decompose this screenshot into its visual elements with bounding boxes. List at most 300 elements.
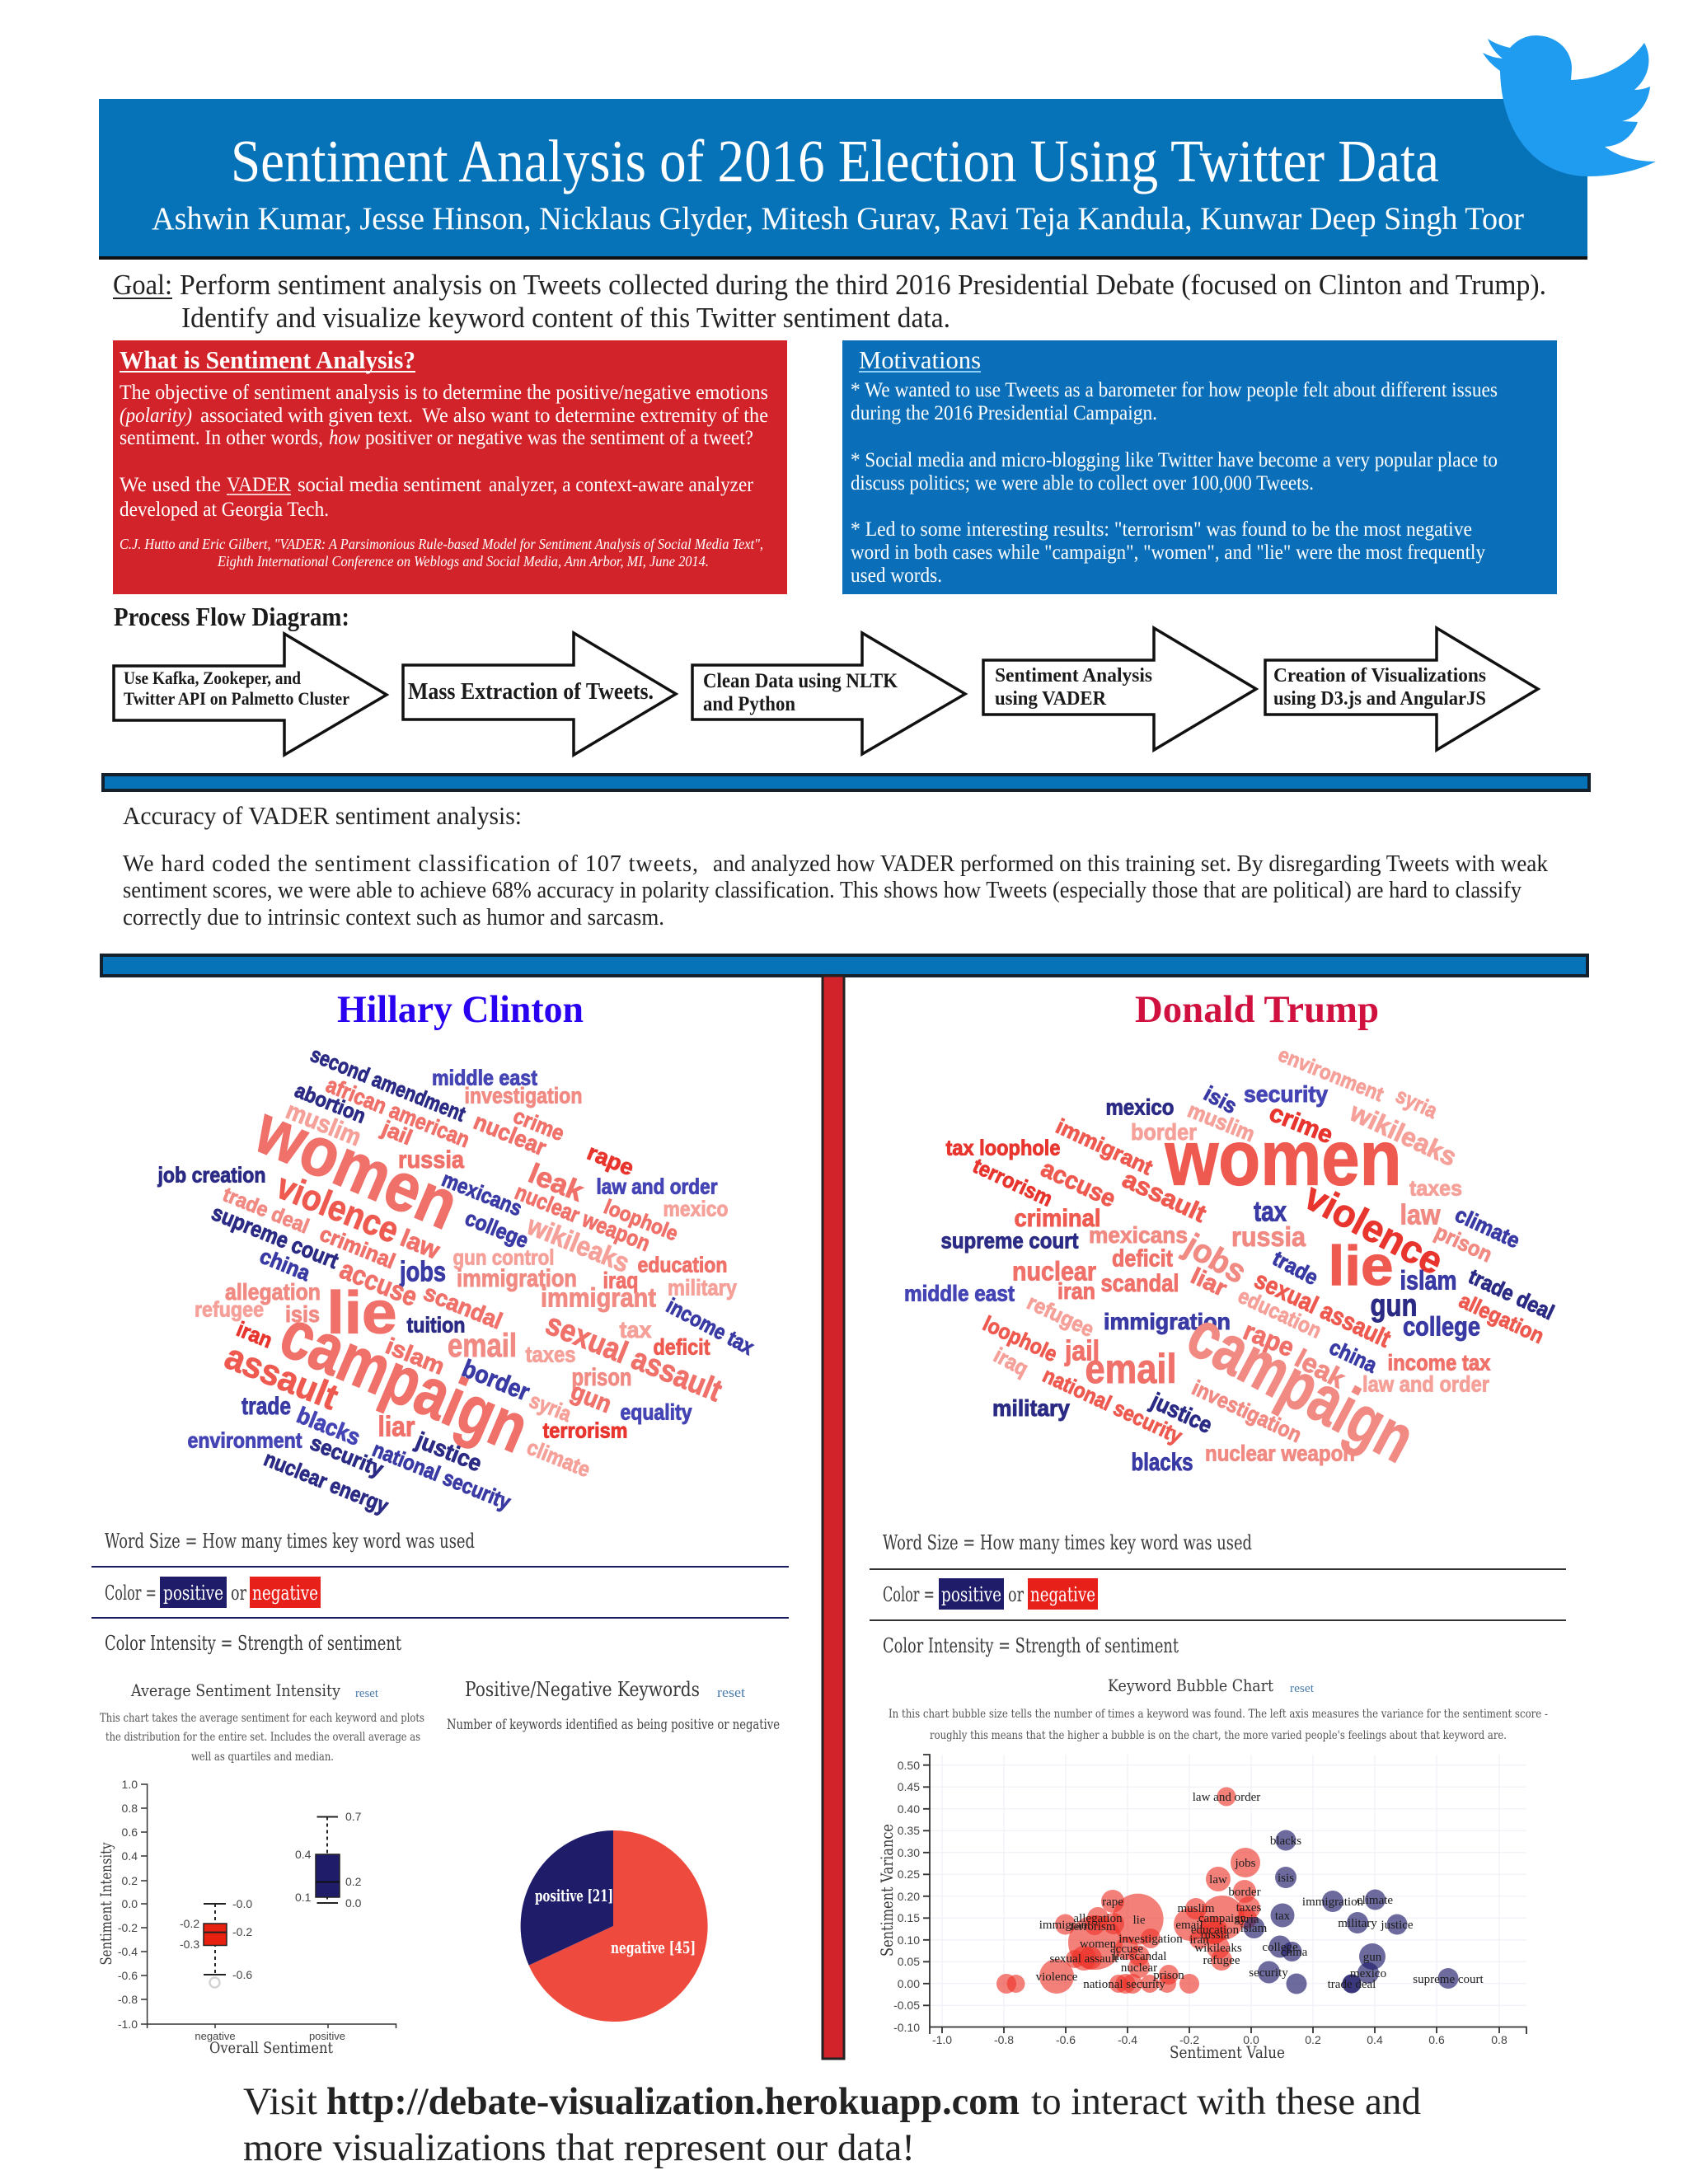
word cloud: clinton: accuse <box>335 1254 422 1312</box>
word cloud: clinton: jobs <box>399 1256 446 1287</box>
legend line: color <box>883 1578 1098 1610</box>
word cloud: trump: tax loophole <box>946 1135 1060 1160</box>
bubble labels: law <box>1209 1873 1227 1886</box>
y axis tick labels: -0.8 <box>118 1993 138 2006</box>
word cloud: clinton: law and order <box>597 1174 717 1198</box>
bubble labels: trade deal <box>1328 1978 1376 1991</box>
word cloud: trump: deficit <box>1112 1245 1173 1272</box>
footer call to action: Visit <box>243 2080 317 2123</box>
word cloud: clinton: crime <box>510 1103 568 1146</box>
divider band <box>103 775 1589 790</box>
word cloud: trump: allegation <box>1456 1287 1548 1348</box>
word cloud: clinton: middle east <box>432 1065 537 1090</box>
box: negative: -0.2 <box>232 1925 252 1938</box>
word cloud: trump: education <box>1235 1283 1325 1343</box>
x axis tick labels: -0.4 <box>1118 2033 1137 2046</box>
word cloud: trump: nuclear <box>1012 1257 1096 1286</box>
x axis tick labels: 0.4 <box>1367 2033 1383 2046</box>
y axis tick labels: 0.00 <box>898 1977 920 1990</box>
word cloud: trump: syria <box>1392 1083 1442 1123</box>
word cloud: clinton: leak <box>524 1158 588 1208</box>
word cloud: trump: gun <box>1370 1288 1418 1323</box>
word cloud: clinton: law <box>396 1225 444 1265</box>
word cloud: trump: crime <box>1265 1099 1337 1149</box>
word cloud: trump: criminal <box>1014 1205 1101 1232</box>
y axis tick labels: 0.4 <box>122 1849 138 1863</box>
x axis tick labels: -1.0 <box>932 2033 952 2046</box>
bubble labels: supreme court <box>1413 1973 1484 1986</box>
bubble labels: china <box>1281 1946 1308 1959</box>
arrow 4: using VADER <box>995 688 1107 710</box>
word cloud: clinton: china <box>256 1244 314 1286</box>
word cloud: trump: wikileaks <box>1345 1097 1461 1172</box>
legend: trump <box>870 1531 1566 1657</box>
word cloud: clinton: immigrant <box>541 1283 656 1313</box>
y axis tick labels: -0.10 <box>893 2021 920 2034</box>
bubble labels: security <box>1249 1966 1288 1980</box>
accuracy paragraph: sentiment scores, we were able to achieve 68% accuracy in polarity classification. This shows how Tweets (especially those that are political) are hard to classify <box>123 878 1522 903</box>
x axis category labels: negative <box>195 2030 236 2042</box>
panel: what is sentiment analysis <box>113 340 787 594</box>
box: negative: -0.0 <box>232 1897 252 1910</box>
word cloud: clinton: tax <box>620 1317 652 1343</box>
bubble labels: accuse <box>1110 1943 1143 1956</box>
word cloud: clinton: liar <box>377 1411 415 1442</box>
x axis category labels: positive <box>309 2030 345 2042</box>
pie chart <box>521 1830 708 2022</box>
y axis tick labels: 0.6 <box>122 1825 138 1839</box>
box: positive: 0.1 <box>295 1891 312 1904</box>
x axis category labels <box>195 2030 345 2042</box>
footer call to action: http://debate-visualization.herokuapp.com <box>326 2080 1020 2123</box>
goal statement <box>113 269 1546 334</box>
body text: The objective of sentiment analysis is to determine the positive/negative emotions <box>120 382 768 404</box>
word cloud: clinton: jail <box>377 1115 416 1150</box>
arrow 5: Creation of Visualizations <box>1273 665 1486 687</box>
bubble labels: college <box>1262 1941 1298 1954</box>
word cloud: clinton: second amendment <box>307 1042 469 1127</box>
word cloud: trump: climate <box>1451 1202 1524 1253</box>
bubble labels: nuclear <box>1121 1961 1157 1975</box>
y axis tick labels: 0.40 <box>898 1802 920 1816</box>
y axis tick labels: -0.4 <box>118 1945 138 1958</box>
word cloud: trump: iran <box>1057 1278 1095 1304</box>
footer call to action: more visualizations that represent our data! <box>243 2126 915 2169</box>
word cloud: trump: law <box>1400 1199 1441 1230</box>
box: positive: 0.0 <box>345 1896 362 1910</box>
bubble labels: wikileaks <box>1194 1942 1242 1955</box>
bubble labels: women <box>1080 1938 1117 1951</box>
arrow 1 <box>114 634 387 755</box>
word cloud: clinton: deficit <box>653 1335 710 1360</box>
bubble labels: isis <box>1278 1872 1294 1885</box>
y axis title: Sentiment Variance <box>877 1824 897 1957</box>
word cloud: clinton: supreme court <box>209 1200 342 1273</box>
y axis tick labels: 0.8 <box>122 1802 138 1815</box>
word cloud: clinton: sexual assault <box>541 1307 727 1408</box>
word cloud: clinton: mexicans <box>438 1166 526 1221</box>
x axis tick labels <box>932 2033 1507 2046</box>
word cloud: trump: trade <box>1268 1245 1322 1290</box>
bubble labels: islam <box>1240 1922 1268 1935</box>
legend line: color: Color = <box>105 1582 157 1605</box>
word cloud: trump: china <box>1325 1334 1381 1378</box>
positive bubbles <box>1243 1830 1459 1994</box>
word cloud: clinton: military <box>668 1276 737 1301</box>
body text: We used the <box>120 474 221 496</box>
x axis tick labels: 0.6 <box>1428 2033 1445 2046</box>
legend line: color: or <box>231 1582 246 1605</box>
bubble labels: jobs <box>1234 1857 1256 1870</box>
word cloud: clinton: allegation <box>225 1279 321 1305</box>
heading: hillary clinton: Hillary Clinton <box>337 988 584 1031</box>
legend line: color intensity: Color Intensity = Strength of sentiment <box>105 1632 401 1655</box>
bubble labels: prison <box>1153 1969 1184 1982</box>
body text: * Led to some interesting results: "terrorism" was found to be the most negative <box>851 518 1472 541</box>
y axis tick labels: -0.2 <box>118 1921 138 1934</box>
word cloud: trump: military <box>992 1395 1070 1421</box>
word cloud: clinton: trade deal <box>219 1183 312 1239</box>
header banner <box>99 99 1587 260</box>
bubble labels: email <box>1175 1919 1203 1932</box>
y axis tick labels: 0.0 <box>122 1897 138 1910</box>
accuracy heading: Accuracy of VADER sentiment analysis: <box>123 801 522 830</box>
word cloud: clinton: rape <box>584 1140 637 1180</box>
word cloud: trump: immigrant <box>1052 1113 1157 1180</box>
chart description: box plot: the distribution for the entire set. Includes the overall average as <box>106 1731 420 1744</box>
word cloud: clinton: border <box>458 1355 533 1407</box>
word cloud: clinton: criminal <box>316 1221 399 1273</box>
word cloud: clinton: lie <box>326 1280 397 1346</box>
word cloud: trump: national security <box>1039 1362 1187 1449</box>
footer call to action: to interact with these and <box>1031 2080 1421 2123</box>
chart heading: positive/negative keywords: reset <box>717 1685 745 1700</box>
x axis title: Sentiment Value <box>1170 2042 1285 2062</box>
arrow 4 <box>983 628 1256 750</box>
word cloud: trump: environment <box>1275 1043 1387 1106</box>
arrow 2 <box>403 633 676 755</box>
panel: motivations <box>842 340 1557 594</box>
body text: * We wanted to use Tweets as a barometer for how people felt about different issues <box>851 379 1498 401</box>
word cloud: clinton: equality <box>620 1400 692 1425</box>
word cloud: clinton: nuclear <box>470 1108 550 1160</box>
y axis tick labels <box>118 1778 138 2031</box>
word cloud: clinton: islam <box>382 1333 448 1380</box>
chart description: box plot: This chart takes the average sentiment for each keyword and plots <box>100 1712 424 1725</box>
box: positive: 0.2 <box>345 1875 362 1888</box>
body text: word in both cases while "campaign", "women", and "lie" were the most frequently <box>851 541 1485 564</box>
word cloud: clinton: abortion <box>292 1079 369 1128</box>
bubble labels: refugee <box>1203 1954 1240 1967</box>
arrow 5: using D3.js and AngularJS <box>1273 688 1486 710</box>
word cloud: clinton: security <box>307 1430 387 1482</box>
arrow 3: and Python <box>703 693 795 715</box>
bubble labels: taxes <box>1236 1901 1262 1915</box>
word cloud: trump: accuse <box>1037 1155 1120 1213</box>
bubble labels: scandal <box>1130 1950 1166 1963</box>
goal statement: Perform sentiment analysis on Tweets collected during the third 2016 Presidential Debate (focused on Clinton and Trump). <box>180 269 1546 301</box>
word cloud: trump: russia <box>1231 1221 1306 1252</box>
word cloud: trump: lie <box>1328 1235 1394 1297</box>
arrow 1: Twitter API on Palmetto Cluster <box>124 688 349 709</box>
arrow 1: Use Kafka, Zookeper, and <box>124 668 301 688</box>
panel heading: Motivations <box>859 345 981 374</box>
y axis tick labels: 0.35 <box>898 1824 920 1837</box>
word cloud: trump: justice <box>1146 1388 1217 1438</box>
word cloud: clinton: college <box>462 1205 532 1253</box>
body text: social media sentiment <box>298 474 481 496</box>
word cloud: trump: email <box>1085 1346 1177 1392</box>
bubble labels: sexual assault <box>1050 1952 1118 1966</box>
y axis tick labels: 0.2 <box>122 1874 138 1887</box>
bubble labels: violence <box>1036 1971 1078 1984</box>
legend line: color: positive <box>941 1583 1001 1606</box>
word cloud: trump: nuclear weapon <box>1205 1441 1355 1466</box>
chart description: bubble chart: roughly this means that the higher a bubble is on the chart, the more varied people's feelings about that keyword are. <box>930 1729 1507 1742</box>
bubble labels: immigrant <box>1039 1919 1091 1932</box>
x axis tick labels: -0.2 <box>1179 2033 1199 2046</box>
word cloud: clinton: taxes <box>526 1343 575 1367</box>
word cloud: clinton: immigration <box>457 1265 577 1292</box>
word cloud: trump: supreme court <box>941 1229 1078 1254</box>
word cloud: clinton: trade <box>241 1393 291 1420</box>
chart description: bubble chart: In this chart bubble size tells the number of times a keyword was found. The left axis measures the variance for the sentiment score - <box>889 1708 1548 1721</box>
icon: twitter bird <box>1483 35 1656 176</box>
accuracy paragraph: We hard coded the sentiment classification of 107 tweets, <box>123 851 698 877</box>
citation: Eighth International Conference on Weblogs and Social Media, Ann Arbor, MI, June 2014. <box>217 553 709 569</box>
word cloud: clinton: violence <box>271 1166 405 1251</box>
word cloud: trump: jobs <box>1178 1226 1252 1291</box>
word cloud: trump: refugee <box>1024 1290 1098 1342</box>
word cloud: clinton: nuclear weapon <box>511 1179 654 1256</box>
authors: Ashwin Kumar, Jesse Hinson, Nicklaus Glyder, Mitesh Gurav, Ravi Teja Kandula, Kunwar Deep Singh Toor <box>152 201 1524 237</box>
legend line: word size: Word Size = How many times key word was used <box>105 1530 475 1553</box>
box: positive <box>295 1810 362 1910</box>
word cloud: trump: mexicans <box>1089 1222 1188 1248</box>
word cloud: trump: iraq <box>990 1343 1033 1381</box>
y axis tick labels: 0.45 <box>898 1780 920 1793</box>
box: negative: -0.3 <box>180 1938 199 1951</box>
word cloud: clinton: national security <box>369 1436 514 1515</box>
footer call to action <box>243 2080 1421 2169</box>
bubble labels: education <box>1191 1924 1240 1937</box>
arrow 3 <box>692 633 965 754</box>
chart description: bubble chart <box>889 1708 1548 1742</box>
slice: negative <box>529 1830 708 2022</box>
x axis tick labels: -0.8 <box>994 2033 1014 2046</box>
word cloud: clinton: environment <box>188 1427 302 1452</box>
word cloud: trump: mexico <box>1106 1095 1174 1120</box>
body text: sentiment. In other words, <box>120 427 323 449</box>
bubble labels: justice <box>1380 1919 1414 1932</box>
bubble labels: muslim <box>1177 1902 1215 1915</box>
bubble labels: immigration <box>1302 1896 1364 1909</box>
word cloud: trump: sexual assault <box>1250 1267 1395 1353</box>
legend line: color <box>105 1577 321 1608</box>
legend line: word size: Word Size = How many times key word was used <box>883 1531 1252 1554</box>
bubble labels: climate <box>1357 1894 1393 1907</box>
body text: developed at Georgia Tech. <box>120 499 329 521</box>
y axis tick labels: 0.10 <box>898 1933 920 1947</box>
bubble labels: national security <box>1083 1978 1165 1991</box>
word cloud: trump: women <box>1165 1115 1402 1202</box>
bubble labels: mexico <box>1350 1967 1386 1980</box>
word cloud: trump: loophole <box>979 1310 1062 1366</box>
bubble labels: liar <box>1113 1950 1129 1963</box>
panel heading: What is Sentiment Analysis? <box>120 345 415 374</box>
word cloud: trump: middle east <box>904 1282 1015 1306</box>
word cloud: trump: liar <box>1187 1263 1231 1301</box>
word cloud: clinton: isis <box>285 1301 320 1327</box>
accuracy paragraph: and analyzed how VADER performed on this training set. By disregarding Tweets with weak <box>713 851 1548 877</box>
word cloud: trump: isis <box>1200 1080 1241 1118</box>
body text: VADER <box>227 474 291 496</box>
box plot chart <box>97 1778 396 2057</box>
word cloud: trump: taxes <box>1409 1175 1462 1200</box>
bubble labels <box>1036 1791 1484 1991</box>
bubble chart <box>877 1755 1526 2062</box>
arrow 4: Sentiment Analysis <box>995 665 1152 687</box>
word cloud: trump: border <box>1131 1119 1197 1145</box>
word cloud: clinton: tuition <box>407 1312 465 1337</box>
bubble labels: tax <box>1275 1910 1291 1923</box>
legend line: color: negative <box>252 1582 318 1605</box>
word cloud: trump: scandal <box>1101 1270 1179 1297</box>
y axis title: Sentiment Intensity <box>97 1842 115 1965</box>
bubble labels: allegation <box>1073 1912 1123 1925</box>
label: negative: negative [45] <box>611 1938 696 1957</box>
x axis tick labels: -0.6 <box>1056 2033 1076 2046</box>
word cloud: trump: prison <box>1431 1219 1496 1267</box>
word cloud: clinton: email <box>448 1328 517 1364</box>
word cloud: trump: income tax <box>1387 1351 1491 1376</box>
accuracy paragraph: correctly due to intrinsic context such as humor and sarcasm. <box>123 905 664 930</box>
process flow arrows <box>114 628 1538 755</box>
box: negative: -0.2 <box>180 1917 199 1930</box>
word cloud: clinton: education <box>638 1252 727 1277</box>
y axis tick labels: -1.0 <box>118 2018 138 2031</box>
x axis title: Overall Sentiment <box>209 2039 333 2057</box>
word cloud: clinton: african american <box>322 1072 473 1152</box>
chart heading: average sentiment intensity: reset <box>355 1687 379 1700</box>
word cloud: trump: investigation <box>1189 1376 1306 1447</box>
legend line: color: or <box>1008 1583 1024 1606</box>
chart description: box plot: well as quartiles and median. <box>191 1750 334 1764</box>
bubble labels: gun <box>1363 1951 1382 1964</box>
legend: clinton <box>91 1530 789 1655</box>
word cloud: trump: terrorism <box>969 1153 1057 1212</box>
chart heading: positive/negative keywords: Positive/Negative Keywords <box>465 1678 700 1701</box>
bubble labels: investigation <box>1118 1933 1183 1946</box>
word cloud: clinton: iran <box>233 1316 276 1352</box>
bubble labels: russia <box>1200 1929 1230 1942</box>
centre divider bar <box>823 976 844 2059</box>
box: negative: -0.6 <box>232 1968 252 1981</box>
y axis tick labels: 0.05 <box>898 1955 920 1968</box>
bubble labels: campaign <box>1198 1912 1247 1925</box>
word cloud: trump: jail <box>1064 1335 1100 1366</box>
bubble labels: lie <box>1132 1914 1146 1927</box>
word cloud: trump <box>904 1043 1558 1477</box>
y axis tick labels: -0.05 <box>893 1999 920 2012</box>
axes <box>923 1755 1526 2034</box>
goal statement: Identify and visualize keyword content of this Twitter sentiment data. <box>181 302 950 334</box>
divider band <box>101 955 1587 976</box>
arrow 2: Mass Extraction of Tweets. <box>408 679 654 705</box>
y axis tick labels: 0.30 <box>898 1846 920 1859</box>
y axis tick labels: 0.50 <box>898 1759 920 1772</box>
y axis tick labels: 0.20 <box>898 1890 920 1903</box>
word cloud: trump: blacks <box>1131 1449 1193 1476</box>
word cloud: clinton: iraq <box>603 1268 638 1293</box>
heading: donald trump: Donald Trump <box>1135 988 1379 1031</box>
bubble labels: terrorism <box>1071 1920 1116 1933</box>
word cloud: clinton: gun control <box>453 1244 554 1269</box>
word cloud: clinton: mexico <box>663 1196 729 1221</box>
body text: positiver or negative was the sentiment of a tweet? <box>365 427 753 449</box>
chart description: box plot <box>100 1712 424 1764</box>
x axis tick labels: 0.0 <box>1243 2033 1259 2046</box>
title: Sentiment Analysis of 2016 Election Using Twitter Data <box>231 128 1439 194</box>
bubble labels: law and order <box>1193 1791 1260 1804</box>
bubble labels: border <box>1228 1886 1261 1899</box>
accuracy paragraph <box>123 851 1548 930</box>
legend line: color: Color = <box>883 1583 935 1606</box>
body text: during the 2016 Presidential Campaign. <box>851 402 1157 424</box>
word cloud: clinton: russia <box>398 1146 464 1174</box>
word cloud: trump: campaign <box>1175 1296 1426 1477</box>
word cloud: trump: college <box>1403 1312 1480 1342</box>
negative bubbles <box>996 1787 1260 1994</box>
word cloud: clinton: nuclear energy <box>260 1446 392 1518</box>
body text: discuss politics; we were able to collect over 100,000 Tweets. <box>851 472 1314 494</box>
word cloud: clinton: muslim <box>282 1097 365 1151</box>
word cloud: clinton: scandal <box>420 1279 506 1334</box>
word cloud: clinton: climate <box>523 1434 594 1482</box>
legend line: color: negative <box>1030 1583 1095 1606</box>
x axis tick labels: 0.8 <box>1491 2033 1507 2046</box>
box: positive: 0.4 <box>295 1848 312 1861</box>
y axis tick labels: 0.25 <box>898 1868 920 1881</box>
label: positive: positive [21] <box>535 1886 613 1905</box>
legend line: color: positive <box>163 1582 223 1605</box>
word cloud: trump: immigration <box>1104 1309 1231 1334</box>
word cloud: trump: rape <box>1240 1315 1298 1362</box>
legend line: color intensity: Color Intensity = Strength of sentiment <box>883 1634 1179 1657</box>
x axis tick labels: 0.2 <box>1305 2033 1321 2046</box>
bubble labels: blacks <box>1270 1835 1301 1848</box>
arrow 5 <box>1265 628 1538 750</box>
word cloud: clinton: assault <box>219 1336 344 1418</box>
body text: used words. <box>851 565 942 587</box>
y axis tick labels: 0.15 <box>898 1911 920 1924</box>
accuracy section <box>123 801 1548 930</box>
word cloud: clinton: blacks <box>293 1402 364 1451</box>
word cloud: trump: leak <box>1290 1343 1350 1394</box>
body text: analyzer, a context-aware analyzer <box>489 474 754 496</box>
axes <box>141 1784 396 2028</box>
citation <box>120 536 763 569</box>
box: positive: 0.7 <box>345 1810 362 1823</box>
word cloud: clinton: campaign <box>270 1294 540 1467</box>
y axis tick labels: -0.6 <box>118 1969 138 1982</box>
chart heading: keyword bubble chart: reset <box>1290 1682 1315 1695</box>
y axis tick labels: 1.0 <box>122 1778 138 1791</box>
word cloud: trump: law and order <box>1362 1372 1489 1397</box>
heading: process flow diagram: Process Flow Diagram: <box>114 602 349 631</box>
chart description: pie: Number of keywords identified as being positive or negative <box>447 1717 780 1733</box>
word cloud: trump: trade deal <box>1465 1263 1558 1324</box>
